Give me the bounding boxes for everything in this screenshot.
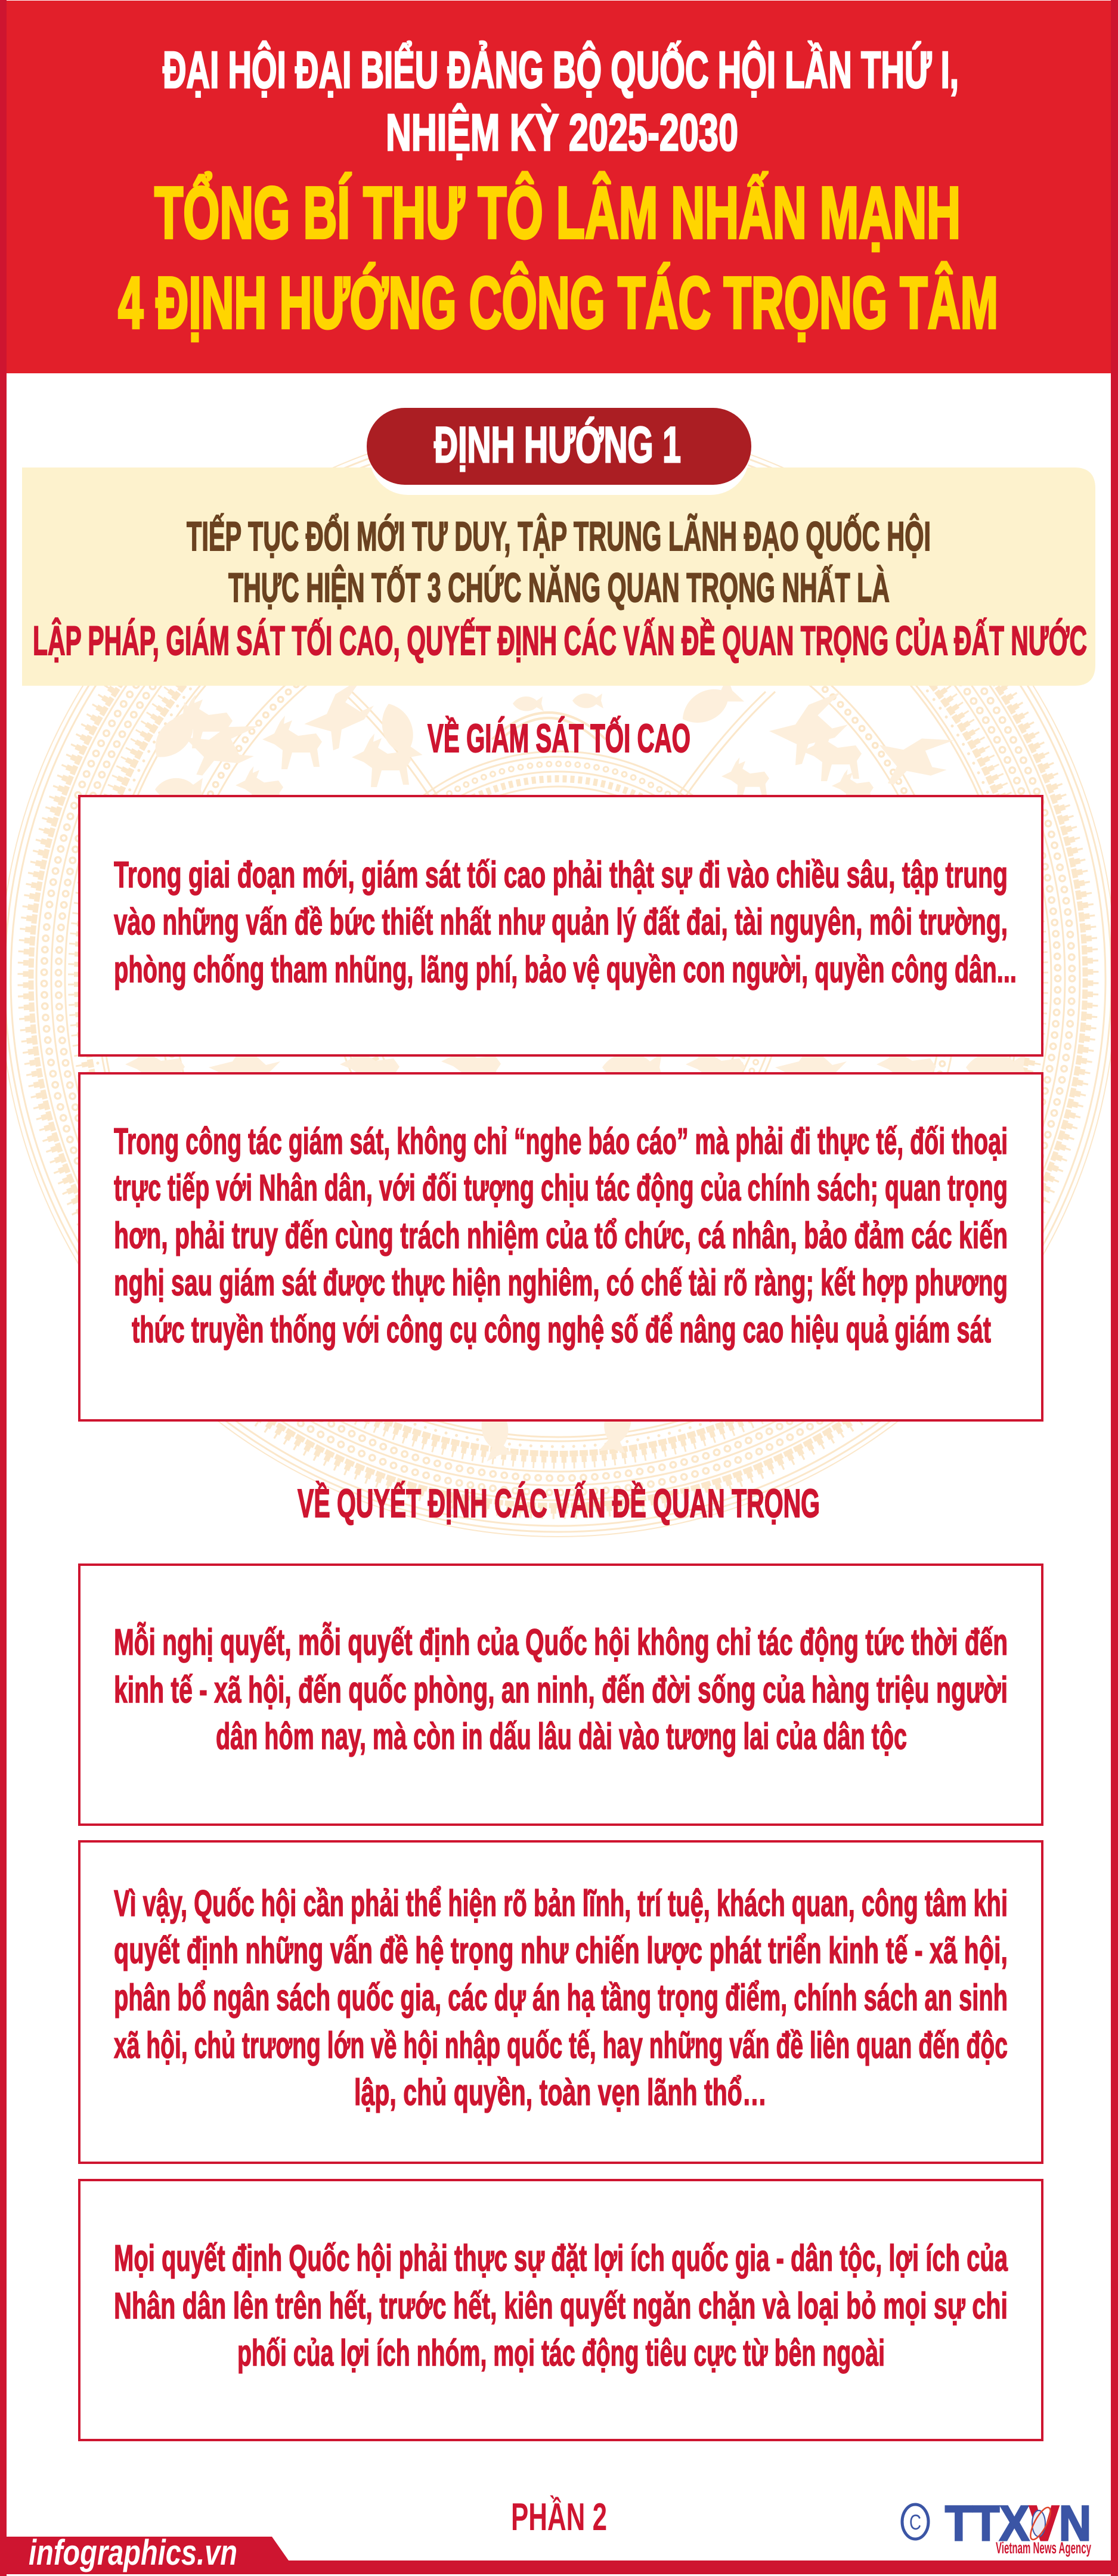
pill label: ĐỊNH HƯỚNG 1 [434, 417, 681, 473]
background: bronze drum pattern [0, 420, 1116, 1537]
box 4 [79, 1841, 1042, 2163]
header banner [7, 1, 1111, 373]
page frame: right border [1111, 0, 1118, 2576]
box 4 text: lập, chủ quyền, toàn vẹn lãnh thổ… [354, 2072, 767, 2113]
box 2 [79, 1073, 1042, 1420]
heading: supervision: VỀ GIÁM SÁT TỐI CAO [428, 716, 690, 761]
icon: copyright [902, 2504, 928, 2539]
box 3 text [114, 1622, 1008, 1757]
pill: orientation 1 [367, 408, 751, 495]
icon: globe orbit [1027, 2505, 1054, 2542]
box 5 text [114, 2238, 1008, 2374]
box 5 [79, 2180, 1042, 2440]
footer bar [0, 2532, 1118, 2574]
box 4 text [114, 1883, 1008, 2113]
box 3 [79, 1565, 1042, 1825]
icon: copyright: C [909, 2510, 921, 2534]
part label: PHẦN 2 [511, 2495, 607, 2538]
panel: orientation summary [22, 467, 1095, 686]
box 1 [79, 796, 1042, 1055]
title line 2: NHIỆM KỲ 2025-2030 [386, 104, 738, 162]
logo: TTXVN [902, 2496, 1091, 2557]
website label: infographics.vn [29, 2532, 237, 2572]
box 2 text [114, 1121, 1008, 1351]
agency wordmark: TTXVN [945, 2496, 1091, 2551]
page frame: left border [0, 0, 7, 2576]
box 1 text [114, 854, 1017, 990]
